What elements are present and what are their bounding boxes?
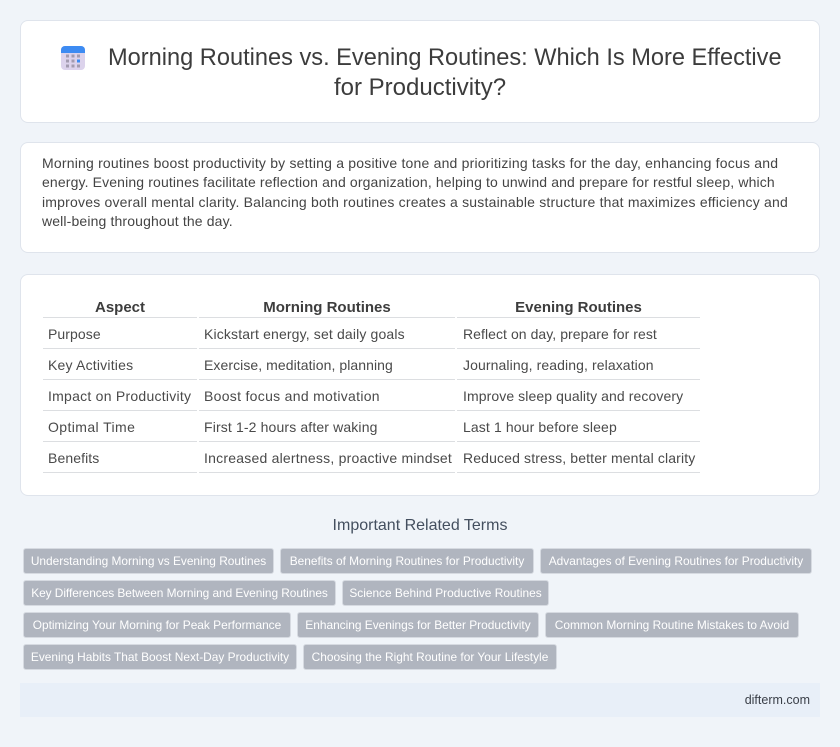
tags: Understanding Morning vs Evening Routines <box>31 554 266 568</box>
panel: comparison table <box>20 274 820 496</box>
row: key activities: Journaling, reading, relaxation <box>463 357 654 373</box>
footer bar <box>20 683 820 717</box>
row: purpose: Purpose <box>48 326 101 342</box>
row: benefits: Increased alertness, proactive mindset <box>204 450 452 466</box>
summary text: well-being throughout the day. <box>42 213 233 229</box>
row: benefits: Reduced stress, better mental clarity <box>463 450 695 466</box>
row: optimal time: Last 1 hour before sleep <box>463 419 617 435</box>
tags: Evening Habits That Boost Next-Day Productivity <box>31 650 289 664</box>
tags: Science Behind Productive Routines <box>349 586 542 600</box>
title: Morning Routines vs. Evening Routines: Which Is More Effective <box>108 45 782 71</box>
tags <box>23 548 812 670</box>
tags: Benefits of Morning Routines for Productivity <box>290 554 524 568</box>
title <box>108 45 782 101</box>
row: purpose: Kickstart energy, set daily goals <box>204 326 405 342</box>
row: impact: Boost focus and motivation <box>204 388 380 404</box>
row: key activities <box>48 357 654 373</box>
row: purpose: Reflect on day, prepare for rest <box>463 326 657 342</box>
footer text: difterm.com <box>745 693 810 707</box>
table header: morning: Morning Routines <box>263 299 391 316</box>
heading: related terms: Important Related Terms <box>333 517 507 534</box>
row: optimal time <box>48 419 617 435</box>
row: benefits: Benefits <box>48 450 99 466</box>
table header: aspect: Aspect <box>95 299 145 316</box>
summary text: improves overall mental clarity. Balancing both routines creates a sustainable structure that maximizes efficiency and <box>42 194 788 210</box>
summary text <box>42 155 788 229</box>
tags: Common Morning Routine Mistakes to Avoid <box>555 618 789 632</box>
panel: summary card <box>20 142 820 253</box>
row: optimal time: First 1-2 hours after waking <box>204 419 378 435</box>
title: for Productivity? <box>334 74 506 101</box>
panel: title card <box>20 20 820 123</box>
row: impact <box>48 388 684 404</box>
tags: Key Differences Between Morning and Evening Routines <box>31 586 328 600</box>
table header: evening: Evening Routines <box>515 299 642 316</box>
row: key activities: Exercise, meditation, planning <box>204 357 393 373</box>
row: impact: Improve sleep quality and recovery <box>463 388 683 404</box>
tags: Choosing the Right Routine for Your Lifestyle <box>312 650 548 664</box>
row: key activities: Key Activities <box>48 357 133 373</box>
row: optimal time: Optimal Time <box>48 419 135 435</box>
row: impact: Impact on Productivity <box>48 388 191 404</box>
summary text: Morning routines boost productivity by setting a positive tone and prioritizing tasks for the day, enhancing focus and <box>42 155 778 171</box>
tags: Enhancing Evenings for Better Productivity <box>305 618 531 632</box>
table <box>43 317 700 473</box>
tags: Optimizing Your Morning for Peak Performance <box>33 618 281 632</box>
summary text: energy. Evening routines facilitate reflection and organization, helping to unwind and prepare for restful sleep, which <box>42 174 775 190</box>
row: benefits <box>48 450 696 466</box>
row: purpose <box>48 326 657 342</box>
icon: calendar <box>61 46 85 70</box>
tags: Advantages of Evening Routines for Productivity <box>549 554 803 568</box>
